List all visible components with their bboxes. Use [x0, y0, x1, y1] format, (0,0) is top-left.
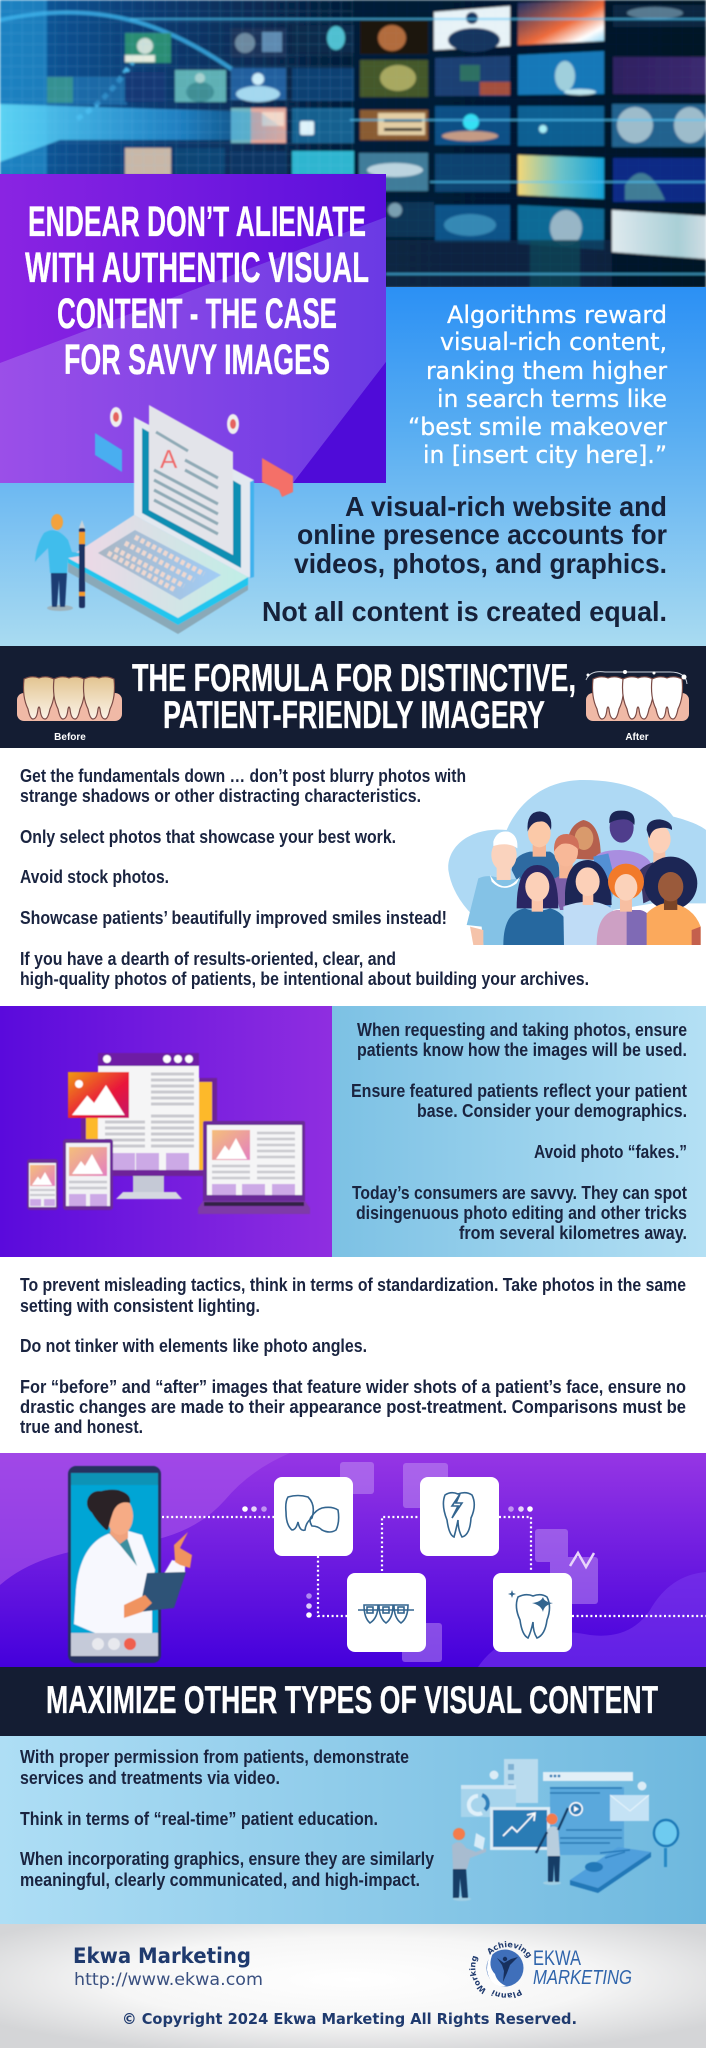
panel: blue text background — [332, 1006, 706, 1257]
text block: algorithms reward: in [insert city here].” — [423, 441, 667, 469]
illustration: devices — [27, 1053, 310, 1214]
text block: permission: Think in terms of “real-time” patient education. — [20, 1809, 378, 1829]
icon: pin hearts — [110, 407, 239, 434]
text block: permission: meaningful, clearly communicated, and high-impact. — [20, 1870, 420, 1890]
front row — [517, 865, 558, 908]
icon: envelope — [95, 433, 122, 472]
text block: visual-rich website: Not all content is created equal. — [262, 596, 667, 627]
back row — [512, 852, 559, 883]
logo: Ekwa Marketing: Working — [469, 1956, 486, 1994]
text block: permission — [20, 1747, 434, 1890]
text block: standardization: setting with consistent lighting. — [20, 1296, 260, 1316]
logo: Ekwa Marketing: Achieving — [488, 1941, 532, 1958]
text block: fundamentals: Only select photos that showcase your best work. — [20, 827, 396, 847]
card: broken tooth — [274, 1477, 353, 1556]
icon: person with tablet — [452, 1828, 486, 1901]
card: cracked tooth — [420, 1477, 499, 1556]
footer contact: http://www.ekwa.com — [74, 1970, 263, 1990]
logo: Ekwa Marketing: Planning — [491, 1990, 522, 1998]
title: FOR SAVVY IMAGES — [64, 336, 330, 384]
icon: before teeth: Before — [54, 732, 86, 743]
panel: video and graphics — [0, 1736, 706, 1924]
laptop device — [198, 1121, 310, 1214]
icon: after teeth: After — [625, 732, 649, 743]
icon: phone with doctor — [68, 1466, 192, 1663]
hero photo: wall of video screens — [0, 0, 706, 288]
logo: Ekwa Marketing: MARKETING — [533, 1967, 632, 1989]
footer contact — [73, 1944, 263, 1990]
banner: maximize other types — [0, 1667, 706, 1736]
panel: doctor and dental icons — [0, 1453, 706, 1667]
icon: after teeth — [586, 670, 689, 743]
text block: algorithms reward: “best smile makeover — [408, 413, 667, 441]
icon: red speech bubble — [262, 458, 293, 497]
title: CONTENT - THE CASE — [57, 290, 337, 338]
old person — [467, 876, 540, 945]
panel: purple title block — [0, 174, 386, 483]
text block: visual-rich website — [262, 491, 667, 627]
title: WITH AUTHENTIC VISUAL — [25, 244, 369, 292]
banner: the formula — [0, 646, 706, 748]
card: braces — [347, 1573, 426, 1652]
streak light band — [0, 104, 300, 162]
logo: Ekwa Marketing: EKWA — [533, 1947, 581, 1970]
horizontal light lines — [130, 19, 706, 274]
text block: fundamentals: strange shadows or other distracting characteristics. — [20, 786, 421, 806]
banner heading: PATIENT-FRIENDLY IMAGERY — [163, 694, 545, 737]
panel: purple devices background — [0, 1006, 332, 1257]
translucent squares — [340, 1462, 598, 1662]
text block: visual-rich website: online presence accounts for — [297, 519, 667, 550]
icon: zigzag chart — [570, 1553, 594, 1567]
title — [25, 198, 369, 384]
icon: isometric laptop with document and person — [35, 405, 293, 634]
text block: algorithms reward: Algorithms reward — [447, 301, 667, 329]
icon: standing person with pencil — [35, 514, 85, 611]
image card — [68, 1072, 129, 1118]
text block: fundamentals: If you have a dearth of results-oriented, clear, and — [20, 949, 396, 969]
icon: person at screen — [536, 1808, 568, 1885]
text block: permission: When incorporating graphics, ensure they are similarly — [20, 1849, 434, 1869]
text block: algorithms reward: ranking them higher — [426, 357, 667, 385]
text block: visual-rich website: videos, photos, and graphics. — [294, 548, 667, 579]
text block: fundamentals: Showcase patients’ beautifully improved smiles instead! — [20, 908, 447, 928]
panel: blue intro background — [0, 287, 706, 646]
phone device — [27, 1159, 58, 1210]
text block: fundamentals: high-quality photos of patients, be intentional about building your archives. — [20, 969, 589, 989]
screens column right — [353, 0, 706, 288]
banner heading — [132, 657, 576, 737]
tablet device — [63, 1139, 113, 1210]
text block: visual-rich website: A visual-rich website and — [345, 491, 667, 522]
text block: permission: With proper permission from patients, demonstrate — [20, 1747, 409, 1767]
icon: book — [570, 1847, 651, 1893]
footer contact: Ekwa Marketing — [73, 1944, 251, 1968]
screens column left — [125, 25, 354, 175]
icon: before teeth — [17, 677, 122, 743]
copyright: © Copyright 2024 Ekwa Marketing All Rights Reserved. — [122, 2010, 577, 2028]
card: sparkling tooth — [493, 1573, 572, 1652]
text block: fundamentals: Avoid stock photos. — [20, 867, 169, 887]
text block: permission: services and treatments via video. — [20, 1768, 280, 1788]
text block: algorithms reward: in search terms like — [437, 385, 667, 413]
text block: fundamentals — [20, 766, 589, 989]
title: ENDEAR DON’T ALIENATE — [28, 198, 366, 246]
illustration: diverse group of patients — [448, 780, 706, 945]
illustration: digital content team — [452, 1759, 678, 1901]
text block: algorithms reward: visual-rich content, — [440, 328, 667, 356]
text block: standardization — [20, 1275, 686, 1437]
dotted connectors — [162, 1517, 706, 1616]
text block: fundamentals: Get the fundamentals down … don’t post blurry photos with — [20, 766, 466, 786]
icon: isometric laptop with document and person: A — [160, 444, 178, 474]
text block: standardization: true and honest. — [20, 1417, 143, 1437]
text block: standardization: Do not tinker with elements like photo angles. — [20, 1336, 367, 1356]
icon: magnifier — [654, 1820, 678, 1867]
text block: requesting photos — [351, 1020, 687, 1243]
text block: algorithms reward — [408, 301, 667, 469]
